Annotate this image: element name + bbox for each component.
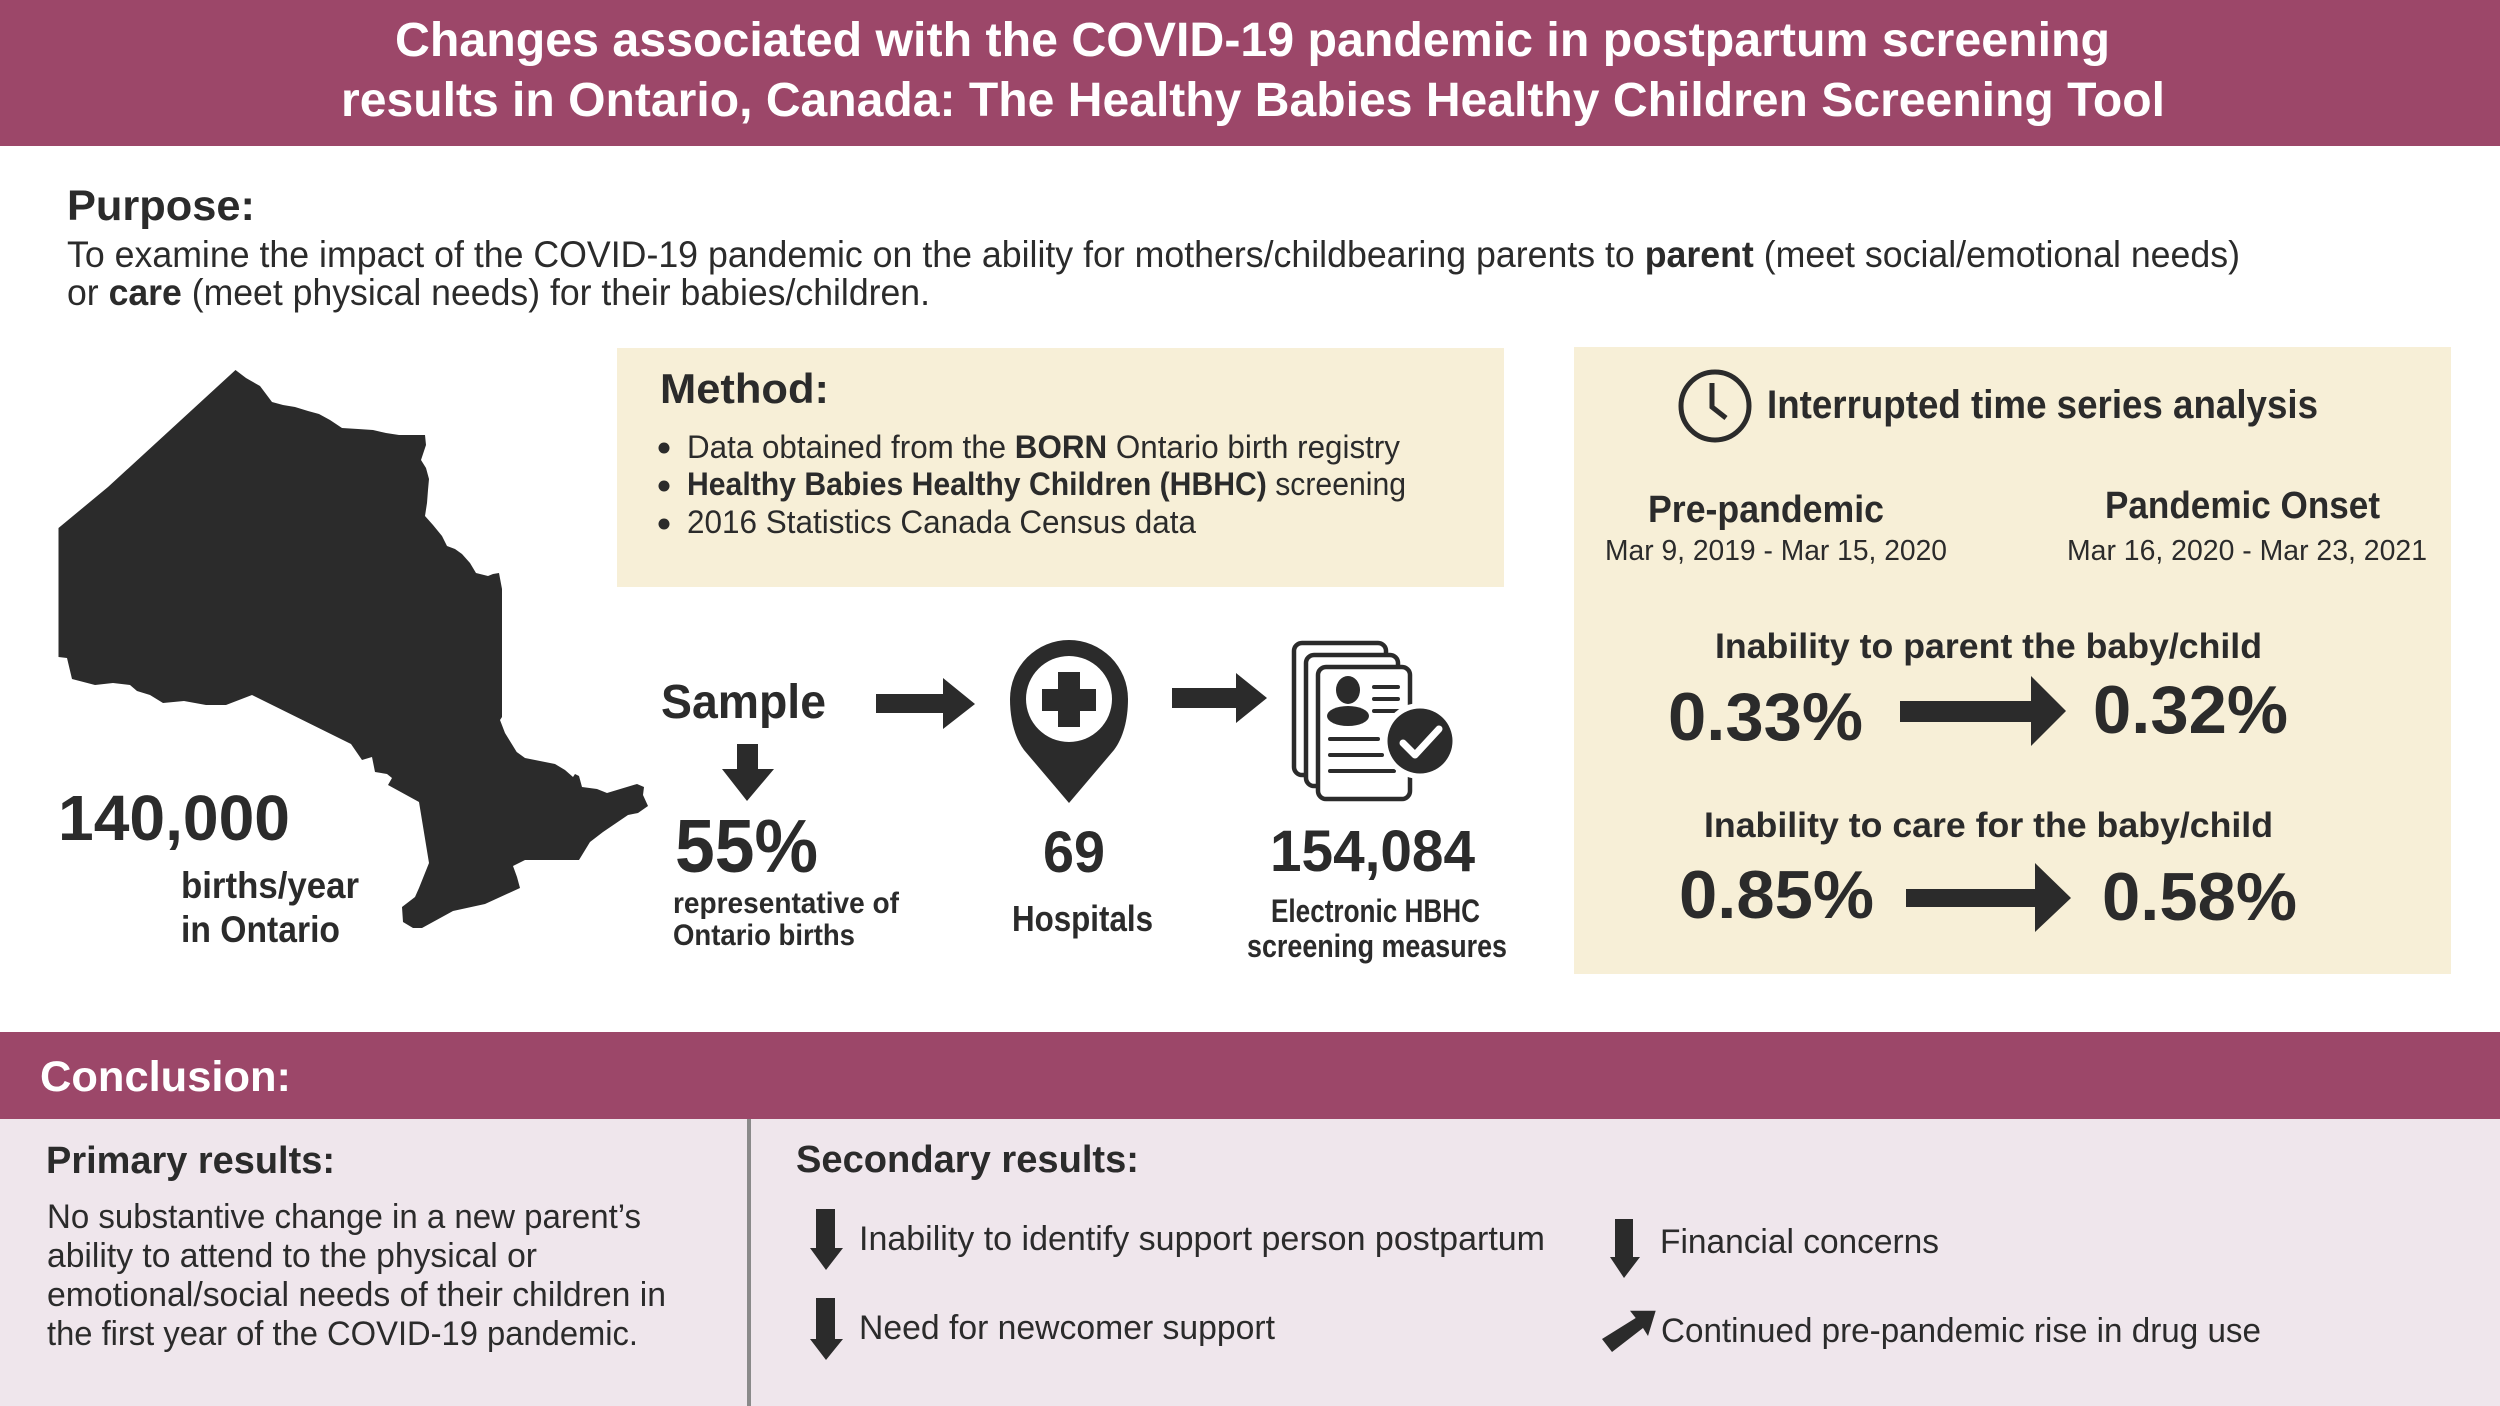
pre-pandemic period: Pre-pandemic <box>1648 489 1884 531</box>
inability to care result: Inability to care for the baby/child <box>1704 806 2273 845</box>
sample statistic <box>673 804 900 952</box>
panel: method: Data obtained from the BORN Ontario birth registry <box>687 429 1400 465</box>
secondary results <box>796 1139 2261 1360</box>
inability to parent result: 0.33% <box>1668 679 1863 755</box>
panel: method: Method: <box>660 365 829 412</box>
pandemic onset period: Mar 16, 2020 - Mar 23, 2021 <box>2067 535 2427 567</box>
result: newcomer support: Need for newcomer support <box>859 1309 1276 1347</box>
births statistic: 140,000 <box>58 782 290 854</box>
screening statistic <box>1247 819 1507 964</box>
conclusion banner <box>0 1032 2500 1119</box>
sample statistic: representative of <box>673 887 900 920</box>
pre-pandemic period <box>1605 489 1947 567</box>
screening statistic: Electronic HBHC <box>1271 893 1480 929</box>
primary results: ability to attend to the physical or <box>47 1237 537 1275</box>
primary results: emotional/social needs of their children in <box>47 1276 666 1314</box>
births statistic: in Ontario <box>181 909 340 950</box>
purpose section: Purpose: <box>67 182 255 230</box>
inability to care result: 0.85% <box>1679 857 1874 933</box>
sample statistic: Ontario births <box>673 919 855 952</box>
purpose section <box>67 182 2240 313</box>
icon: clock <box>1681 372 1749 440</box>
panel: interrupted time series analysis <box>1574 347 2451 974</box>
title banner: results in Ontario, Canada: The Healthy Babies Healthy Children Screening Tool <box>341 74 2165 127</box>
icon: hospital pin <box>1010 640 1128 803</box>
primary results: No substantive change in a new parent’s <box>47 1198 641 1236</box>
pandemic onset period: Pandemic Onset <box>2105 485 2380 527</box>
result: support person: Inability to identify support person postpartum <box>859 1220 1545 1258</box>
pre-pandemic period: Mar 9, 2019 - Mar 15, 2020 <box>1605 535 1947 567</box>
panel: method: Healthy Babies Healthy Children (HBHC) screening <box>687 466 1406 502</box>
title banner: Changes associated with the COVID-19 pandemic in postpartum screening <box>395 14 2110 67</box>
result: financial concerns: Financial concerns <box>1660 1223 1939 1261</box>
purpose section: To examine the impact of the COVID-19 pandemic on the ability for mothers/childbearing parents to parent (meet social/emotional needs) <box>67 234 2240 275</box>
inability to care result: 0.58% <box>2102 859 2297 935</box>
icon: screening documents <box>1294 643 1458 799</box>
sample heading: Sample <box>661 676 826 729</box>
conclusion banner: Conclusion: <box>40 1053 291 1101</box>
analysis heading: Interrupted time series analysis <box>1767 383 2318 427</box>
primary results <box>46 1140 666 1353</box>
primary results: the first year of the COVID-19 pandemic. <box>47 1315 638 1353</box>
screening statistic: screening measures <box>1247 928 1507 964</box>
purpose section: or care (meet physical needs) for their babies/children. <box>67 272 930 313</box>
arrow: hospitals to screening measures <box>1172 673 1267 723</box>
inability to parent result: 0.32% <box>2093 672 2288 748</box>
panel: conclusion results background <box>0 1119 2500 1406</box>
hospitals statistic: Hospitals <box>1012 898 1153 939</box>
sample statistic: 55% <box>675 804 818 888</box>
primary results: Primary results: <box>46 1140 335 1182</box>
result: support person <box>810 1209 1545 1270</box>
result: drug use: Continued pre-pandemic rise in drug use <box>1661 1312 2261 1350</box>
inability to care result <box>1679 806 2297 935</box>
map of Ontario <box>58 370 648 928</box>
result: newcomer support <box>810 1298 1276 1360</box>
title banner <box>0 0 2500 146</box>
screening statistic: 154,084 <box>1270 819 1475 884</box>
panel: method <box>617 348 1504 587</box>
hospitals statistic <box>1012 820 1153 939</box>
pandemic onset period <box>2067 485 2427 567</box>
births statistic: births/year <box>181 865 359 906</box>
inability to parent result <box>1668 627 2288 755</box>
panel: method: 2016 Statistics Canada Census data <box>687 504 1196 540</box>
arrow: sample to hospitals <box>876 678 975 729</box>
inability to parent result: Inability to parent the baby/child <box>1715 627 2262 666</box>
births statistic <box>58 782 359 950</box>
arrow: sample down to percentage <box>722 744 774 801</box>
result: financial concerns <box>1610 1219 1939 1278</box>
secondary results: Secondary results: <box>796 1139 1139 1181</box>
hospitals statistic: 69 <box>1043 820 1105 885</box>
